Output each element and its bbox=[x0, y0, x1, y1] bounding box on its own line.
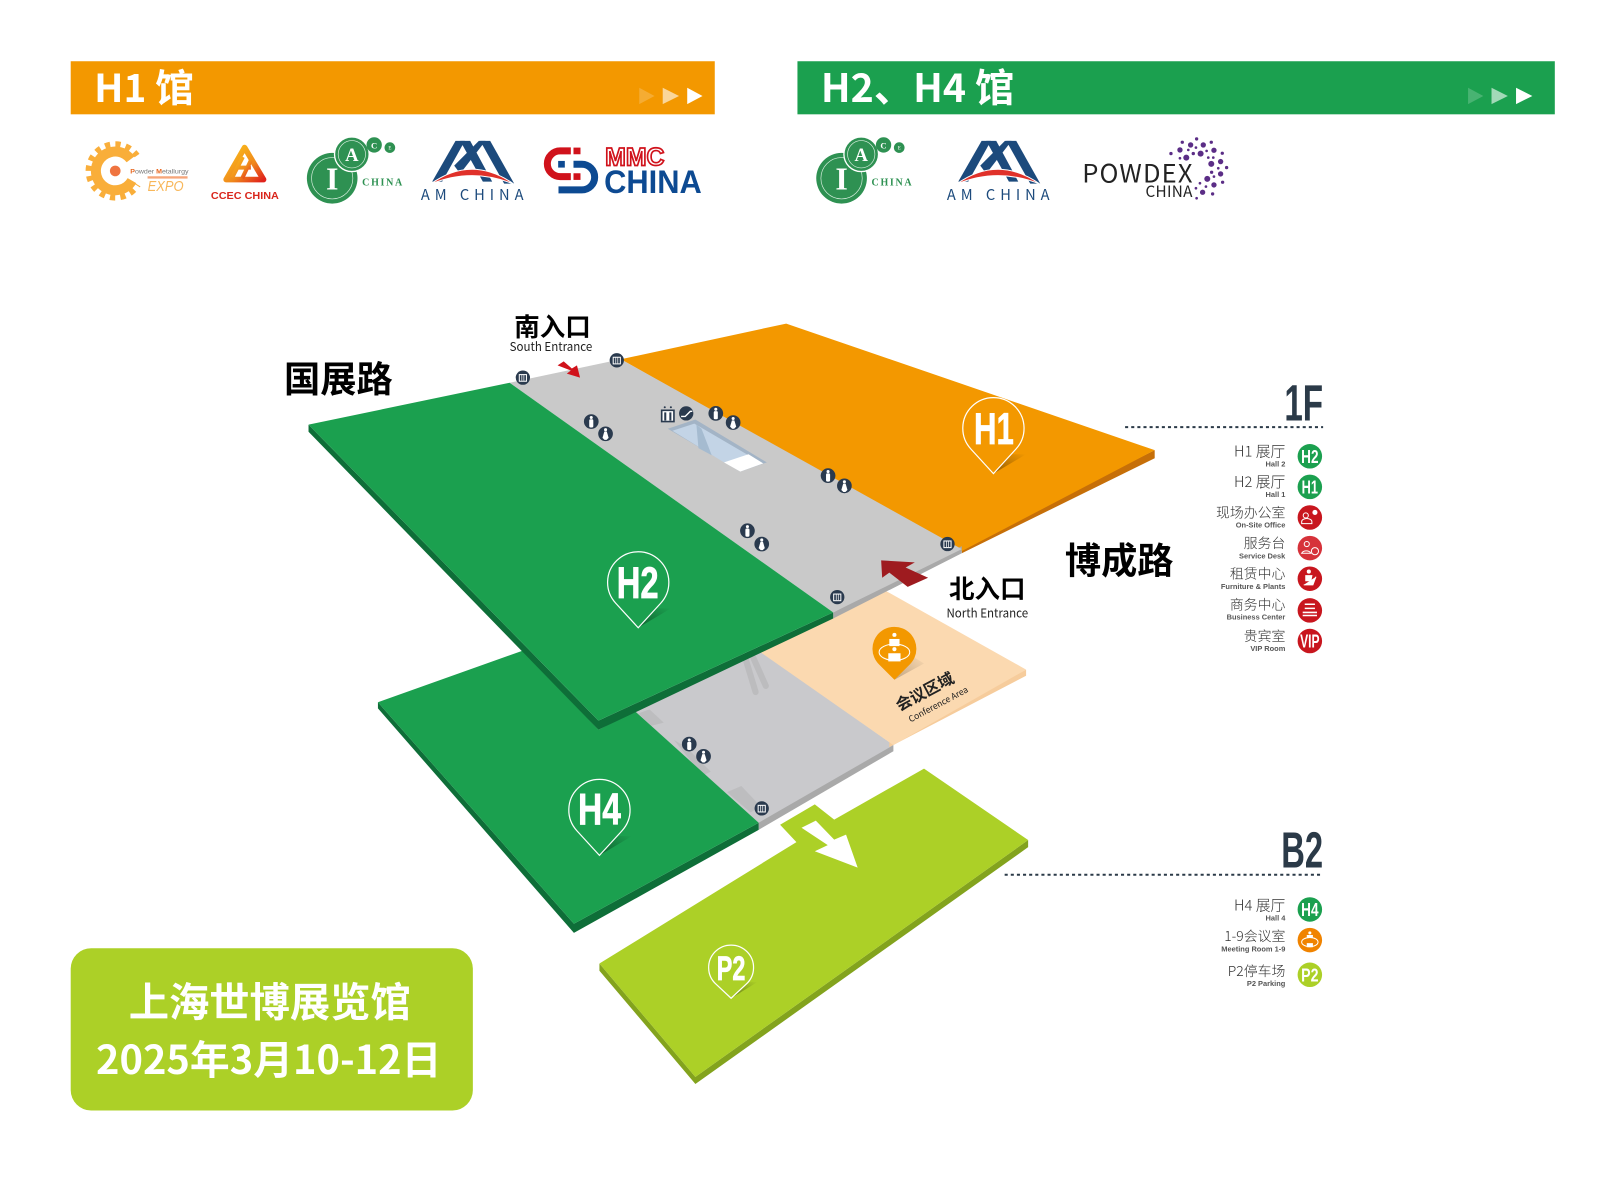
floor label: 1F: 1F bbox=[1284, 375, 1323, 432]
hall H4 bbox=[378, 650, 759, 933]
logo: AM China: AM CHINA bbox=[421, 184, 524, 205]
icon: elevator bbox=[662, 406, 674, 422]
legend row: H4 hall: H4 展厅 bbox=[1234, 894, 1286, 915]
escalator opening bbox=[668, 420, 767, 472]
pin: H4: H4 bbox=[578, 784, 621, 835]
logo: IAC China (H2 H4): CHINA bbox=[872, 178, 912, 189]
legend row: H1 hall: Hall 2 bbox=[1266, 459, 1285, 468]
north entrance label bbox=[946, 569, 1028, 622]
legend row: H1 hall bbox=[1234, 440, 1322, 469]
north entrance label: 北入口 bbox=[949, 569, 1026, 606]
header bar: H1 hall: H1 馆 bbox=[94, 58, 194, 114]
conference area label: Conference Area bbox=[906, 684, 970, 725]
logo: MMC China: MMC bbox=[605, 145, 665, 172]
south entrance label: South Entrance bbox=[510, 337, 592, 355]
legend row: meeting rooms: Meeting Room 1-9 bbox=[1221, 944, 1285, 953]
hall H1 bbox=[621, 324, 1155, 553]
logo: IAC China (H2 H4) bbox=[816, 137, 912, 204]
floor label: B2: B2 bbox=[1281, 822, 1323, 879]
pin: H2 bbox=[608, 552, 671, 628]
legend row: service desk bbox=[1239, 532, 1322, 560]
logo: Powder Metallurgy Expo: Powder Metallurgy bbox=[130, 169, 189, 176]
pin: H1 bbox=[963, 398, 1026, 474]
legend row: H2 hall: H2 展厅 bbox=[1234, 471, 1286, 492]
logo: IAC China: CHINA bbox=[362, 178, 403, 189]
road label: 博成路: 博成路 bbox=[1065, 533, 1174, 585]
legend row: furniture and plants bbox=[1221, 563, 1322, 591]
legend row: VIP room: VIP Room bbox=[1250, 644, 1286, 653]
lower concourse bbox=[635, 650, 893, 830]
pin: P2 bbox=[709, 945, 758, 998]
venue and date box: 上海世博展览馆 bbox=[129, 970, 411, 1029]
legend row: H4 hall bbox=[1234, 894, 1322, 923]
legend row: P2 parking: P2停车场 bbox=[1228, 960, 1285, 980]
arrow: north entrance bbox=[881, 560, 928, 587]
logo: IAC China: E bbox=[388, 147, 391, 152]
pin: H1: H1 bbox=[974, 403, 1014, 454]
legend row: business center bbox=[1227, 593, 1322, 623]
logo: IAC China: A bbox=[345, 145, 359, 166]
legend row: H1 hall: H1 展厅 bbox=[1234, 440, 1286, 461]
icons: lifts bbox=[516, 353, 955, 816]
header bar: H1 hall bbox=[71, 58, 715, 114]
logo: IAC China bbox=[307, 137, 403, 204]
legend row: VIP room bbox=[1244, 625, 1322, 653]
legend row: VIP room: VIP bbox=[1300, 631, 1320, 652]
legend row: business center: 商务中心 bbox=[1230, 593, 1285, 613]
legend row: H1 hall: H2 bbox=[1301, 446, 1319, 467]
header bar: H2, H4 halls bbox=[797, 57, 1555, 114]
legend row: P2 parking bbox=[1228, 960, 1322, 988]
hall H2 bbox=[309, 383, 833, 730]
legend row: meeting rooms: 1-9会议室 bbox=[1224, 925, 1285, 945]
logo: IAC China (H2 H4): E bbox=[898, 147, 901, 152]
logo: IAC China (H2 H4): A bbox=[854, 145, 868, 166]
arrow: south entrance bbox=[558, 361, 580, 378]
arrow: into parking bbox=[802, 821, 858, 868]
legend row: VIP room: 贵宾室 bbox=[1244, 625, 1285, 645]
logo: IAC China: I bbox=[326, 161, 338, 197]
legend row: H4 hall: Hall 4 bbox=[1266, 914, 1286, 923]
road label: 国展路: 国展路 bbox=[284, 351, 393, 403]
legend row: on-site office: 现场办公室 bbox=[1216, 501, 1285, 521]
icon: escalator bbox=[679, 406, 693, 421]
header bar: H2, H4 halls: H2、H4 馆 bbox=[821, 57, 1014, 114]
legend row: furniture and plants: 租赁中心 bbox=[1230, 563, 1285, 583]
logo: AM China (H2 H4): AM CHINA bbox=[947, 184, 1050, 205]
south entrance label: 南入口 bbox=[514, 307, 591, 344]
legend row: on-site office bbox=[1216, 501, 1322, 530]
B2 parking floor: P2 bbox=[599, 769, 1028, 1084]
legend row: H2 hall bbox=[1234, 471, 1322, 499]
main concourse bbox=[510, 359, 962, 619]
legend row: H4 hall: H4 bbox=[1301, 899, 1319, 920]
logo: POWDEX China bbox=[1082, 137, 1228, 202]
legend row: meeting rooms bbox=[1221, 925, 1322, 953]
logo: POWDEX China: POWDEX bbox=[1082, 154, 1193, 191]
pin: P2: P2 bbox=[717, 950, 745, 988]
venue and date box: 2025年3月10-12日 bbox=[96, 1029, 441, 1086]
legend row: on-site office: On-Site Office bbox=[1236, 521, 1285, 530]
logo: Powder Metallurgy Expo bbox=[89, 142, 189, 198]
legend row: furniture and plants: Furniture & Plants bbox=[1221, 582, 1285, 591]
icon: conference pin bbox=[872, 627, 924, 680]
pin: H2: H2 bbox=[617, 557, 659, 608]
conference area label: 会议区域 bbox=[891, 666, 958, 716]
legend row: service desk: 服务台 bbox=[1244, 532, 1285, 552]
logo: MMC China: CHINA bbox=[604, 164, 702, 200]
conference area bbox=[758, 590, 1026, 747]
logo: IAC China (H2 H4): C bbox=[880, 140, 887, 150]
logo: IAC China (H2 H4): I bbox=[835, 161, 848, 197]
pin: H4 bbox=[569, 779, 632, 855]
logo: CCEC China: CCEC CHINA bbox=[211, 191, 279, 202]
logo: Powder Metallurgy Expo: EXPO bbox=[148, 179, 184, 195]
logo: AM China (H2 H4) bbox=[947, 141, 1050, 205]
legend row: P2 parking: P2 bbox=[1301, 964, 1319, 985]
legend row: P2 parking: P2 Parking bbox=[1247, 979, 1286, 988]
legend: 1F bbox=[1216, 440, 1322, 653]
logo: AM China bbox=[421, 141, 524, 205]
legend row: business center: Business Center bbox=[1227, 613, 1285, 622]
logo: MMC China bbox=[547, 145, 702, 200]
legend row: H2 hall: H1 bbox=[1302, 477, 1318, 498]
legend row: H2 hall: Hall 1 bbox=[1266, 490, 1285, 499]
north entrance label: North Entrance bbox=[946, 604, 1028, 622]
icons: toilets bbox=[584, 406, 852, 764]
venue and date box bbox=[71, 948, 473, 1111]
legend row: service desk: Service Desk bbox=[1239, 551, 1286, 560]
legend: B2 bbox=[1221, 894, 1322, 988]
logo: CCEC China bbox=[211, 148, 279, 202]
logo: POWDEX China: CHINA bbox=[1146, 180, 1193, 202]
logo: IAC China: C bbox=[371, 140, 377, 150]
